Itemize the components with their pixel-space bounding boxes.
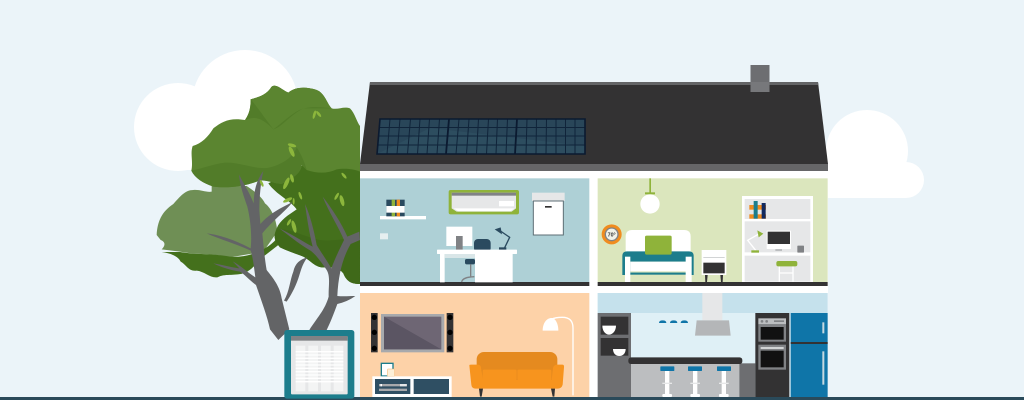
right speaker	[447, 313, 453, 352]
media console	[372, 376, 452, 397]
bedroom wall	[598, 178, 828, 282]
kitchen island	[628, 357, 755, 397]
stool	[776, 261, 797, 282]
office floor	[360, 282, 589, 286]
smart thermostat: 70°	[608, 232, 616, 238]
picture frames	[381, 363, 395, 376]
back canopy	[157, 185, 277, 257]
cloud: right	[820, 110, 924, 198]
left speaker	[371, 313, 378, 352]
canopy right dark	[268, 165, 360, 284]
pendant lights	[659, 320, 688, 323]
computer monitor	[446, 227, 472, 250]
chair back	[474, 239, 491, 252]
canopy upper	[191, 86, 360, 187]
bar stools	[660, 366, 731, 397]
solar panels	[377, 119, 585, 154]
books	[749, 201, 766, 219]
canopy right shade	[275, 229, 360, 284]
office chair	[462, 259, 475, 282]
cup	[797, 246, 804, 253]
air conditioner	[449, 190, 519, 214]
leaves	[259, 110, 347, 233]
canopy upper shade	[191, 86, 332, 187]
air purifier box	[532, 193, 565, 235]
room: kitchen	[598, 293, 828, 397]
left cabinet	[598, 313, 631, 397]
oven tower	[755, 313, 789, 397]
nightstand	[702, 250, 726, 282]
kitchen wall	[598, 293, 828, 397]
bedroom floor	[598, 282, 828, 286]
room: living room	[360, 293, 589, 397]
trunk and branches	[207, 171, 360, 340]
roof	[360, 82, 828, 171]
desk	[437, 250, 517, 282]
unit vents	[296, 346, 343, 391]
computer	[767, 231, 791, 251]
wall outlet	[380, 233, 388, 239]
chimney	[750, 65, 770, 92]
upper wall band	[598, 293, 828, 313]
range hood	[695, 293, 731, 336]
sofa	[469, 352, 564, 397]
canopy top highlight	[251, 86, 332, 129]
room: bedroom	[598, 178, 828, 286]
outdoor heat pump unit	[284, 330, 354, 399]
canopy lower dark	[162, 237, 278, 277]
television	[381, 314, 444, 352]
desk lamp	[495, 227, 510, 250]
shelf with books	[380, 200, 426, 219]
bookcase desk	[742, 196, 813, 282]
ground line	[0, 397, 1024, 400]
room: office	[360, 178, 589, 286]
green desk lamp	[748, 230, 763, 253]
floor lamp	[543, 317, 573, 395]
office wall	[360, 178, 589, 282]
pendant light	[640, 178, 660, 214]
tree	[157, 86, 360, 340]
bed	[622, 230, 694, 282]
smart thermostat	[602, 224, 622, 244]
living room wall	[360, 293, 589, 397]
house body	[360, 171, 828, 397]
cloud: left	[134, 50, 298, 171]
refrigerator	[791, 313, 828, 397]
